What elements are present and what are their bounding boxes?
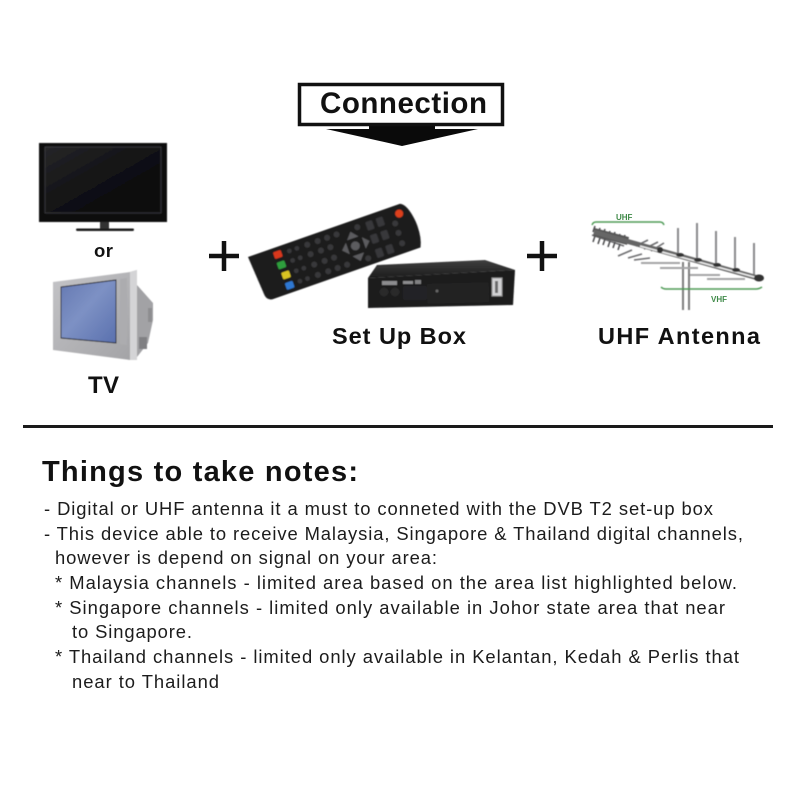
notes text: * Singapore channels - limited only available in Johor state area that near [55, 597, 725, 618]
notes text: - Digital or UHF antenna it a must to conneted with the DVB T2 set-up box [44, 498, 713, 519]
label: TV: TV [88, 372, 119, 399]
heading: notes: Things to take notes: [42, 456, 358, 488]
icon: plus sign 1 [209, 241, 239, 271]
mast [683, 262, 689, 310]
icon: CRT TV [53, 270, 153, 360]
label: VHF small: VHF [711, 295, 727, 304]
heading: Connection with down arrow [300, 84, 502, 146]
label: UHF small: UHF [616, 213, 633, 222]
VHF bracket [661, 287, 762, 289]
panel: set up box [248, 201, 515, 349]
boom [594, 232, 628, 241]
label: Set Up Box: Set Up Box [332, 323, 466, 349]
panel: TV options [39, 143, 167, 399]
VHF elements [678, 223, 754, 275]
label: UHF Antenna: UHF Antenna [598, 323, 761, 349]
power button [394, 209, 404, 219]
UHF bracket [592, 222, 664, 225]
notes text: to Singapore. [72, 621, 192, 642]
notes text [44, 498, 743, 692]
title box [300, 84, 502, 124]
notes text: * Malaysia channels - limited area based on the area list highlighted below. [55, 572, 737, 593]
notes text: near to Thailand [72, 671, 219, 692]
panel: UHF antenna [592, 213, 764, 349]
notes text: however is depend on signal on your area: [55, 547, 437, 568]
notes text: - This device able to receive Malaysia, Singapore & Thailand digital channels, [44, 523, 743, 544]
notes text: * Thailand channels - limited only available in Kelantan, Kedah & Perlis that [55, 646, 739, 667]
title: Connection [320, 87, 487, 120]
number and function keys [286, 211, 407, 286]
label: or: or [94, 240, 113, 261]
icon: flat panel TV [39, 143, 167, 231]
navigation pad [337, 227, 375, 266]
icon: set top box [368, 260, 515, 308]
panel: notes [42, 456, 743, 692]
icon: plus sign 2 [527, 241, 557, 271]
UHF elements [592, 229, 664, 260]
arrow pointing down [326, 124, 478, 146]
icon: remote control [248, 201, 424, 302]
colour buttons [273, 250, 295, 290]
icon: antenna [592, 222, 764, 310]
